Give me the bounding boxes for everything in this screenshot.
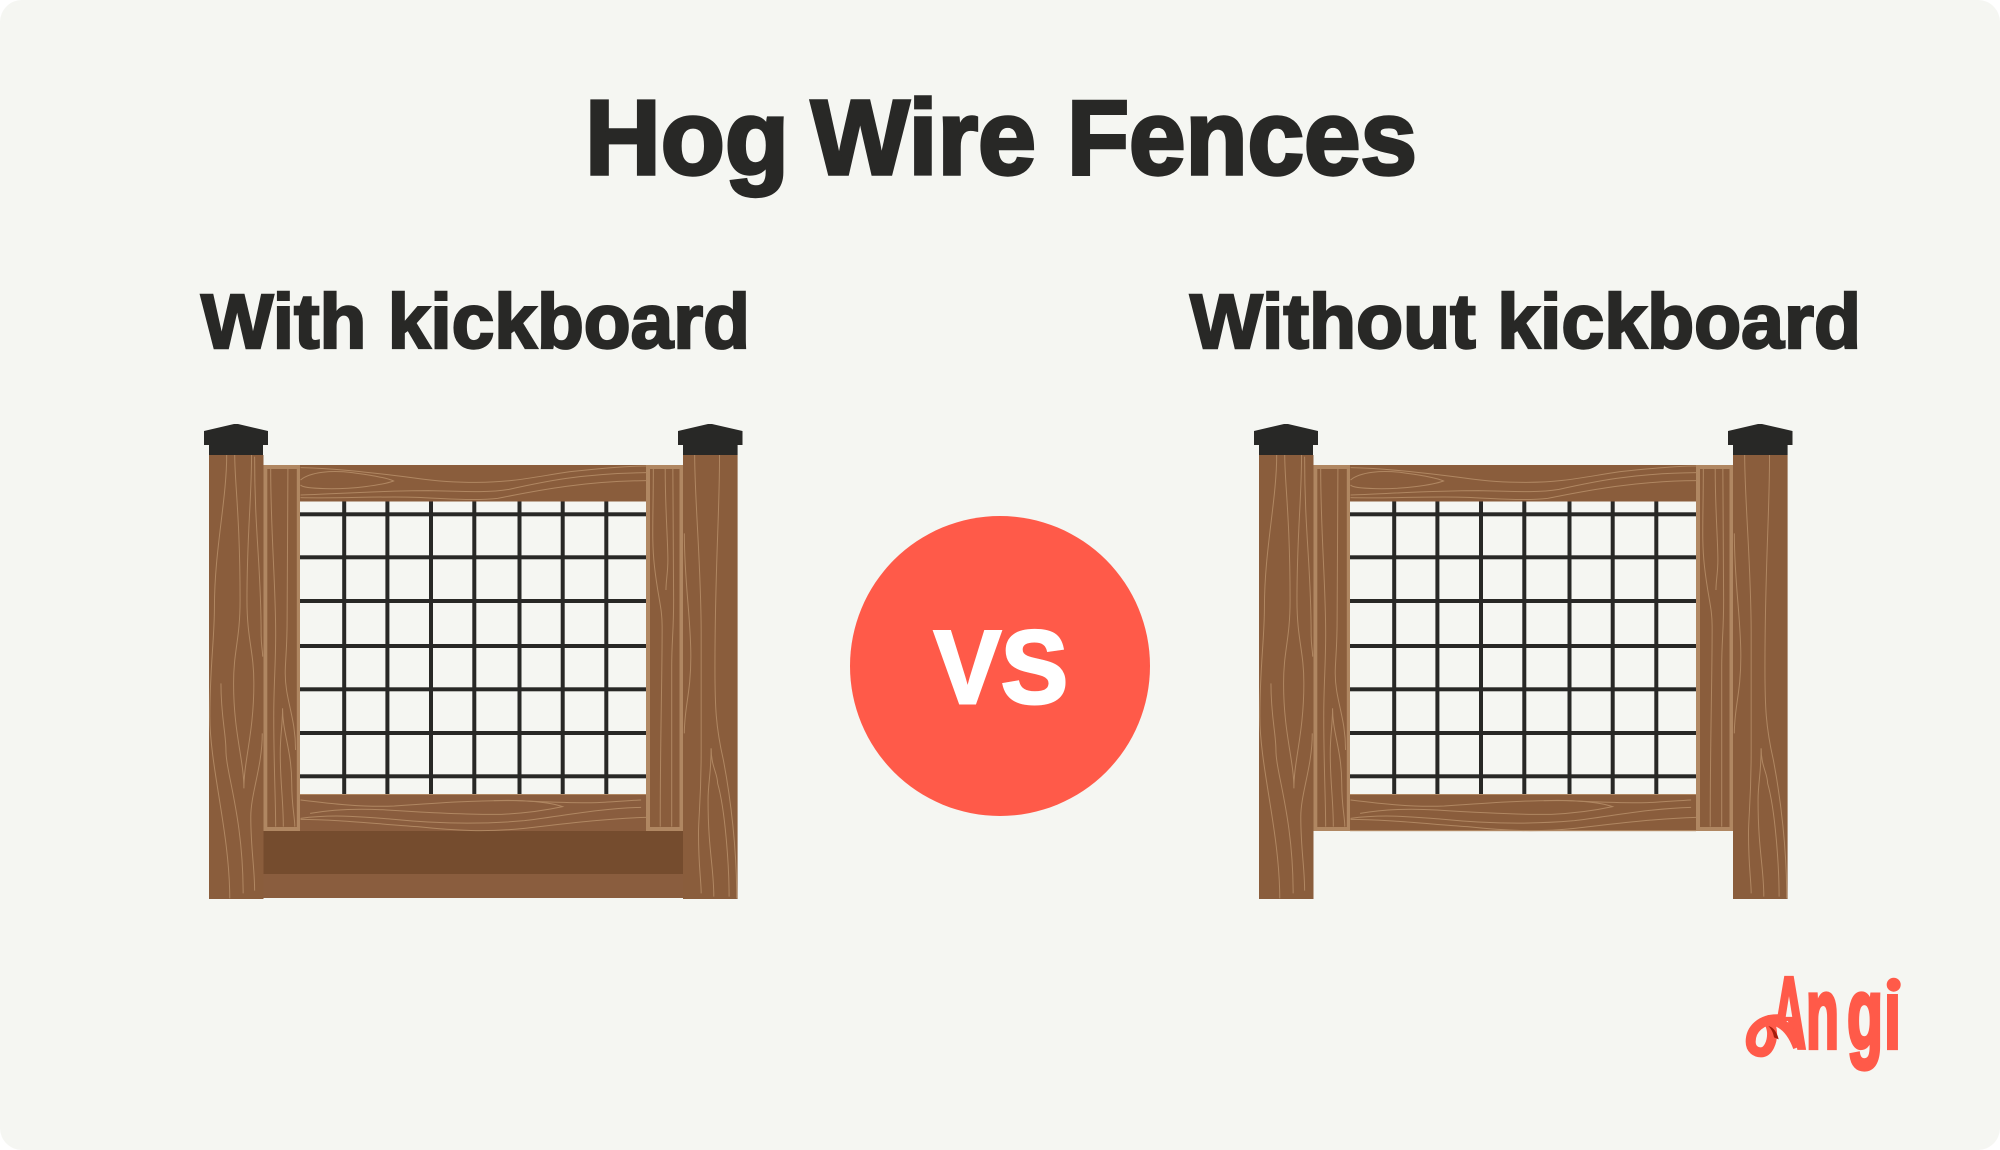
logo i dot (1882, 970, 1904, 994)
logo wordmark: g (1847, 958, 1883, 1070)
title: Hog (585, 79, 789, 197)
outer posts (209, 455, 738, 899)
inner posts (263, 465, 683, 831)
badge circle (850, 516, 1150, 816)
title: Wire (811, 79, 1036, 197)
wire mesh (300, 500, 646, 795)
kickboard (263, 831, 683, 898)
top and bottom rails (300, 465, 646, 831)
outer posts (1259, 455, 1788, 899)
vs label: VS (934, 610, 1068, 726)
wire mesh (1350, 500, 1696, 795)
post caps (204, 424, 742, 455)
inner posts (1313, 465, 1733, 831)
logo loop (1751, 1019, 1798, 1052)
fence with kickboard (204, 424, 742, 899)
fence without kickboard (1254, 424, 1792, 899)
wood grain (1260, 455, 1787, 898)
logo wordmark: n (1806, 958, 1839, 1070)
logo wordmark: i (1884, 958, 1901, 1070)
heading: with kickboard: With kickboard (201, 279, 750, 365)
title: Fences (1067, 79, 1417, 197)
logo: Angi (1746, 976, 1901, 1072)
wood grain (210, 455, 737, 898)
post caps (1254, 424, 1792, 455)
logo wordmark: A (1772, 958, 1806, 1070)
top and bottom rails (1350, 465, 1696, 831)
heading: without kickboard: Without kickboard (1190, 279, 1861, 365)
vs badge (850, 516, 1150, 816)
